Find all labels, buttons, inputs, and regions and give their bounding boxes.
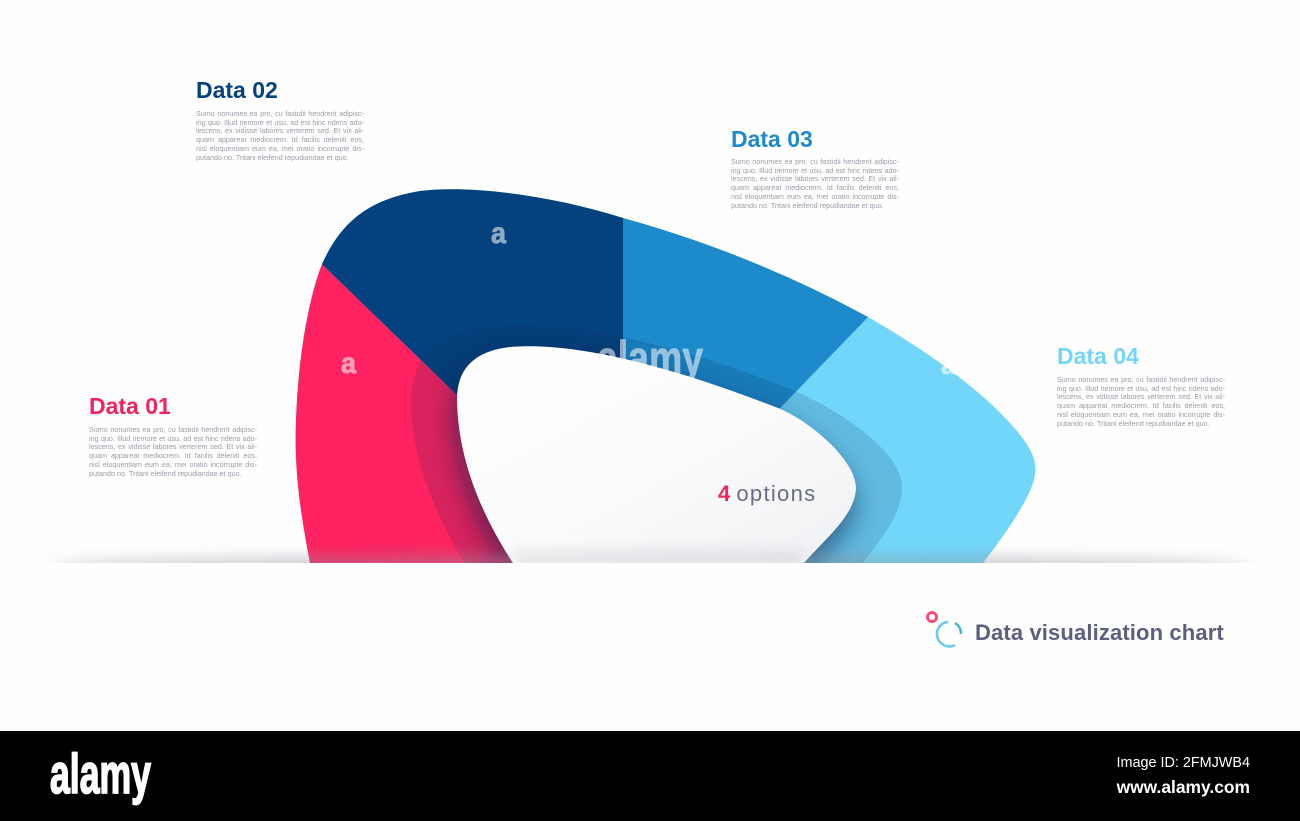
text block: Data 04: nisl eloquentiam eum ea, mei oratio incorrupte dis-	[1057, 410, 1225, 419]
heading: Data 04: Data 04	[1057, 343, 1139, 369]
text block: Data 01: lescens, ex vidisse labores verterem sed. Et vix ali-	[89, 442, 257, 451]
text block: Data 04: lescens, ex vidisse labores verterem sed. Et vix ali-	[1057, 392, 1225, 401]
text block: Data 03: putando no. Tritani eleifend repudiandae et quo.	[731, 201, 884, 210]
segment: Data 01 pink	[296, 264, 513, 563]
text block: Data 04: Sumo nonumes ea pro, cu fastidii hendrerit adipisc-	[1057, 375, 1225, 384]
text block: Data 01	[89, 425, 257, 478]
text block: Data 03: nisl eloquentiam eum ea, mei oratio incorrupte dis-	[731, 192, 899, 201]
text block: Data 01: Sumo nonumes ea pro, cu fastidii hendrerit adipisc-	[89, 425, 257, 434]
text block: Data 04: ing quo. Illud nemore et usu, ad est hinc ridens ado-	[1057, 384, 1225, 393]
text block: Data 03: Sumo nonumes ea pro, cu fastidii hendrerit adipisc-	[731, 157, 899, 166]
text block: Data 04: putando no. Tritani eleifend repudiandae et quo.	[1057, 419, 1210, 428]
text block: Data 02: putando no. Tritani eleifend repudiandae et quo.	[196, 153, 349, 162]
text block: Data 02: nisl eloquentiam eum ea, mei oratio incorrupte dis-	[196, 144, 364, 153]
ground shadow	[57, 548, 1243, 563]
website: www.alamy.com	[1117, 777, 1250, 797]
centre label: 4 options: 4 options	[718, 481, 816, 506]
icon: ring logo	[926, 611, 962, 648]
text block: Data 02: quam appareat mediocrem. Id facilis deleniti eos,	[196, 135, 364, 144]
footer bar	[0, 731, 1300, 821]
watermark: alamy	[341, 217, 957, 384]
heading: Data 03: Data 03	[731, 126, 813, 152]
segment: Data 03 blue	[623, 218, 868, 408]
image id: Image ID: 2FMJWB4	[1116, 755, 1250, 771]
heading: Data 01: Data 01	[89, 393, 171, 419]
text block: Data 01: putando no. Tritani eleifend repudiandae et quo.	[89, 469, 242, 478]
text block: Data 03	[731, 157, 899, 210]
text block: Data 02	[196, 109, 364, 162]
watermark: alamy: a	[491, 217, 506, 250]
text block: Data 04	[1057, 375, 1225, 428]
watermark: alamy: a	[941, 353, 957, 380]
segment: Data 04 light blue	[296, 189, 1035, 563]
watermark: alamy: alamy	[597, 331, 703, 384]
text block: Data 01: nisl eloquentiam eum ea, mei oratio incorrupte dis-	[89, 460, 257, 469]
ground shadow over centre	[513, 550, 804, 566]
text block: Data 03: lescens, ex vidisse labores verterem sed. Et vix ali-	[731, 174, 899, 183]
watermark: alamy: a	[341, 347, 356, 380]
centre white shape	[457, 346, 856, 563]
text block: Data 02: ing quo. Illud nemore et usu, ad est hinc ridens ado-	[196, 118, 364, 127]
segment: Data 02 navy	[322, 189, 623, 396]
text block: Data 03: quam appareat mediocrem. Id facilis deleniti eos,	[731, 183, 899, 192]
text block: Data 01: ing quo. Illud nemore et usu, ad est hinc ridens ado-	[89, 434, 257, 443]
chart: four option shape	[57, 189, 1243, 563]
text block: Data 01: quam appareat mediocrem. Id facilis deleniti eos,	[89, 451, 257, 460]
text block: Data 02: Sumo nonumes ea pro, cu fastidii hendrerit adipisc-	[196, 109, 364, 118]
heading: Data 02: Data 02	[196, 77, 278, 103]
inner shadow ring	[411, 325, 902, 577]
caption: Data visualization chart: Data visualization chart	[975, 620, 1224, 645]
text block: Data 02: lescens, ex vidisse labores verterem sed. Et vix ali-	[196, 126, 364, 135]
text block: Data 03: ing quo. Illud nemore et usu, ad est hinc ridens ado-	[731, 166, 899, 175]
text block: Data 04: quam appareat mediocrem. Id facilis deleniti eos,	[1057, 401, 1225, 410]
